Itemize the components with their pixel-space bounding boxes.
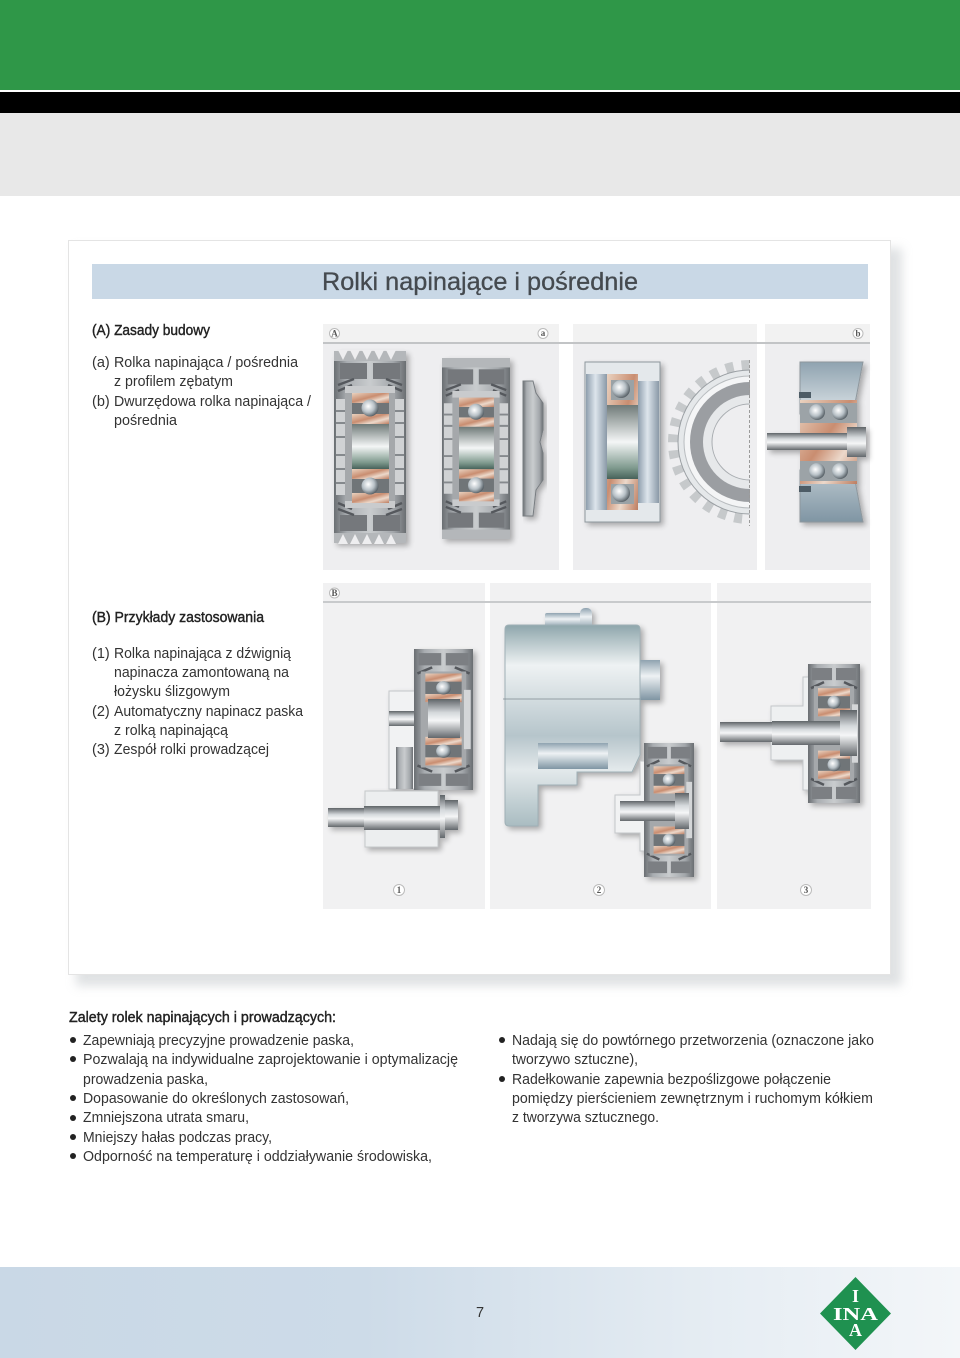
text block: section B: napinacza zamontowaną na — [114, 665, 290, 681]
list: advantages right column: pomiędzy pierścieniem zewnętrznym i ruchomym kółkiem — [512, 1091, 873, 1107]
label: a — [538, 328, 548, 338]
label: 2: 2 — [597, 885, 602, 895]
figure: sectioned bearing — [585, 362, 660, 522]
text block: section A: Dwurzędowa rolka napinająca / — [114, 394, 312, 410]
footer band — [0, 1267, 960, 1358]
label: b — [853, 328, 863, 338]
figure: toothed pulley roller — [334, 350, 406, 544]
text block: section A: (A) Zasady budowy — [92, 323, 211, 339]
panel: main card — [68, 240, 902, 986]
list: advantages left column: Dopasowanie do określonych zastosowań, — [83, 1091, 349, 1107]
text block: section B: łożysku ślizgowym — [114, 684, 230, 700]
list: advantages left column: Zapewniają precyzyjne prowadzenie paska, — [83, 1033, 354, 1049]
label: b: b — [855, 328, 861, 338]
text block: section A: (b) — [92, 394, 110, 410]
text block: section A: (a) — [92, 355, 110, 371]
label: 1 — [394, 884, 404, 896]
text block: section B: (1) — [92, 646, 110, 662]
label: B: B — [331, 588, 338, 598]
figure: tensioner on lever with plain bearing — [328, 649, 473, 847]
text block: section A: Rolka napinająca / pośrednia — [114, 355, 299, 371]
label: 2 — [594, 884, 604, 896]
list: advantages left column: Odporność na temperaturę i oddziaływanie środowiska, — [83, 1149, 432, 1165]
figure: toothed wheel half view — [668, 360, 750, 526]
text block: section B: Automatyczny napinacz paska — [114, 704, 304, 720]
list: advantages left column: Mniejszy hałas podczas pracy, — [83, 1130, 272, 1146]
list: advantages left column — [70, 1033, 458, 1165]
list: advantages right column: tworzywo sztuczne), — [512, 1052, 638, 1068]
label: 3: 3 — [804, 885, 809, 895]
list: advantages right column — [499, 1033, 874, 1126]
list: advantages left column: Zmniejszona utrata smaru, — [83, 1110, 249, 1126]
panel: figure A backgrounds — [323, 324, 870, 570]
list: advantages left column: Pozwalają na indywidualne zaprojektowanie i optymalizację — [83, 1052, 458, 1068]
figure: cover disc — [523, 381, 543, 516]
text block: section A: z profilem zębatym — [114, 374, 233, 390]
label: A — [330, 328, 340, 338]
figure: double row roller with bolt — [767, 362, 866, 522]
header: grey band — [0, 113, 960, 196]
title bar: Rolki napinające i pośrednie — [322, 268, 638, 296]
header: black band — [0, 92, 960, 113]
figure: roller without teeth — [442, 358, 510, 539]
logo: INA: A — [849, 1320, 862, 1340]
label: A: A — [331, 328, 338, 338]
figure: guide roller unit with bolt — [720, 664, 860, 803]
list: advantages right column: Radełkowanie zapewnia bezpoślizgowe połączenie — [512, 1072, 831, 1088]
text block: section B: (2) — [92, 704, 110, 720]
page number: 7 — [476, 1305, 484, 1321]
text block: section B: z rolką napinającą — [114, 723, 229, 739]
logo: INA: I — [852, 1286, 859, 1306]
text block: section B: Rolka napinająca z dźwignią — [114, 646, 292, 662]
text block: section A: pośrednia — [114, 413, 178, 429]
text block: section B: (3) — [92, 742, 110, 758]
label: 3 — [800, 884, 812, 896]
label: a: a — [541, 328, 546, 338]
figure: automatic belt tensioner — [503, 608, 694, 877]
text block: section B — [92, 610, 304, 758]
text block: section B: Zespół rolki prowadzącej — [114, 742, 269, 758]
header: green band — [0, 0, 960, 90]
logo: INA — [820, 1277, 891, 1350]
label: 1: 1 — [397, 885, 402, 895]
title bar — [92, 264, 868, 299]
list: advantages left column: prowadzenia paska, — [83, 1072, 208, 1088]
text block: section A — [92, 323, 312, 429]
panel: figure B backgrounds — [323, 583, 871, 909]
label: B — [330, 588, 340, 598]
list: advantages right column: z tworzywa sztucznego. — [512, 1110, 659, 1126]
heading: advantages: Zalety rolek napinających i prowadzących: — [69, 1010, 336, 1026]
list: advantages right column: Nadają się do powtórnego przetworzenia (oznaczone jako — [512, 1033, 874, 1049]
text block: section B: (B) Przykłady zastosowania — [92, 610, 265, 626]
logo: INA: INA — [833, 1304, 878, 1324]
